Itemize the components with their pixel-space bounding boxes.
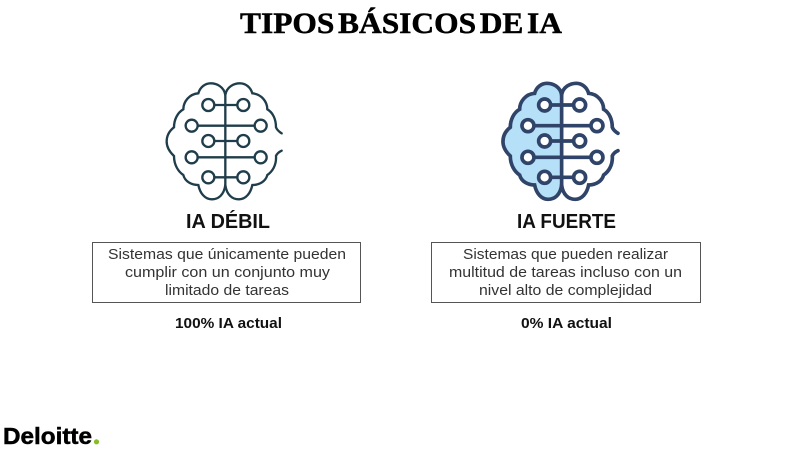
icon: filled brain circuit: [503, 83, 618, 199]
icon: outlined brain circuit: [167, 83, 282, 199]
panel: IA débil: [92, 83, 360, 332]
description box: cumplir con un conjunto muy: [125, 265, 331, 281]
description box: [432, 242, 700, 302]
title: TIPOS BÁSICOS DE IA: [240, 7, 562, 40]
stat: 0% IA actual: 0% IA actual: [521, 316, 612, 332]
logo: Deloitte: Deloitte: [3, 423, 92, 449]
heading: IA fuerte: IA FUERTE: [517, 211, 616, 233]
description box: Sistemas que pueden realizar: [463, 247, 668, 263]
stat: 100% IA actual: 100% IA actual: [175, 316, 282, 332]
description box: multitud de tareas incluso con un: [449, 265, 682, 281]
heading: IA débil: IA DÉBIL: [186, 210, 270, 233]
description box: [92, 242, 360, 302]
description box: limitado de tareas: [165, 283, 289, 299]
description box: Sistemas que únicamente pueden: [108, 247, 346, 263]
panel: IA fuerte: [432, 83, 700, 332]
description box: nivel alto de complejidad: [479, 283, 652, 299]
